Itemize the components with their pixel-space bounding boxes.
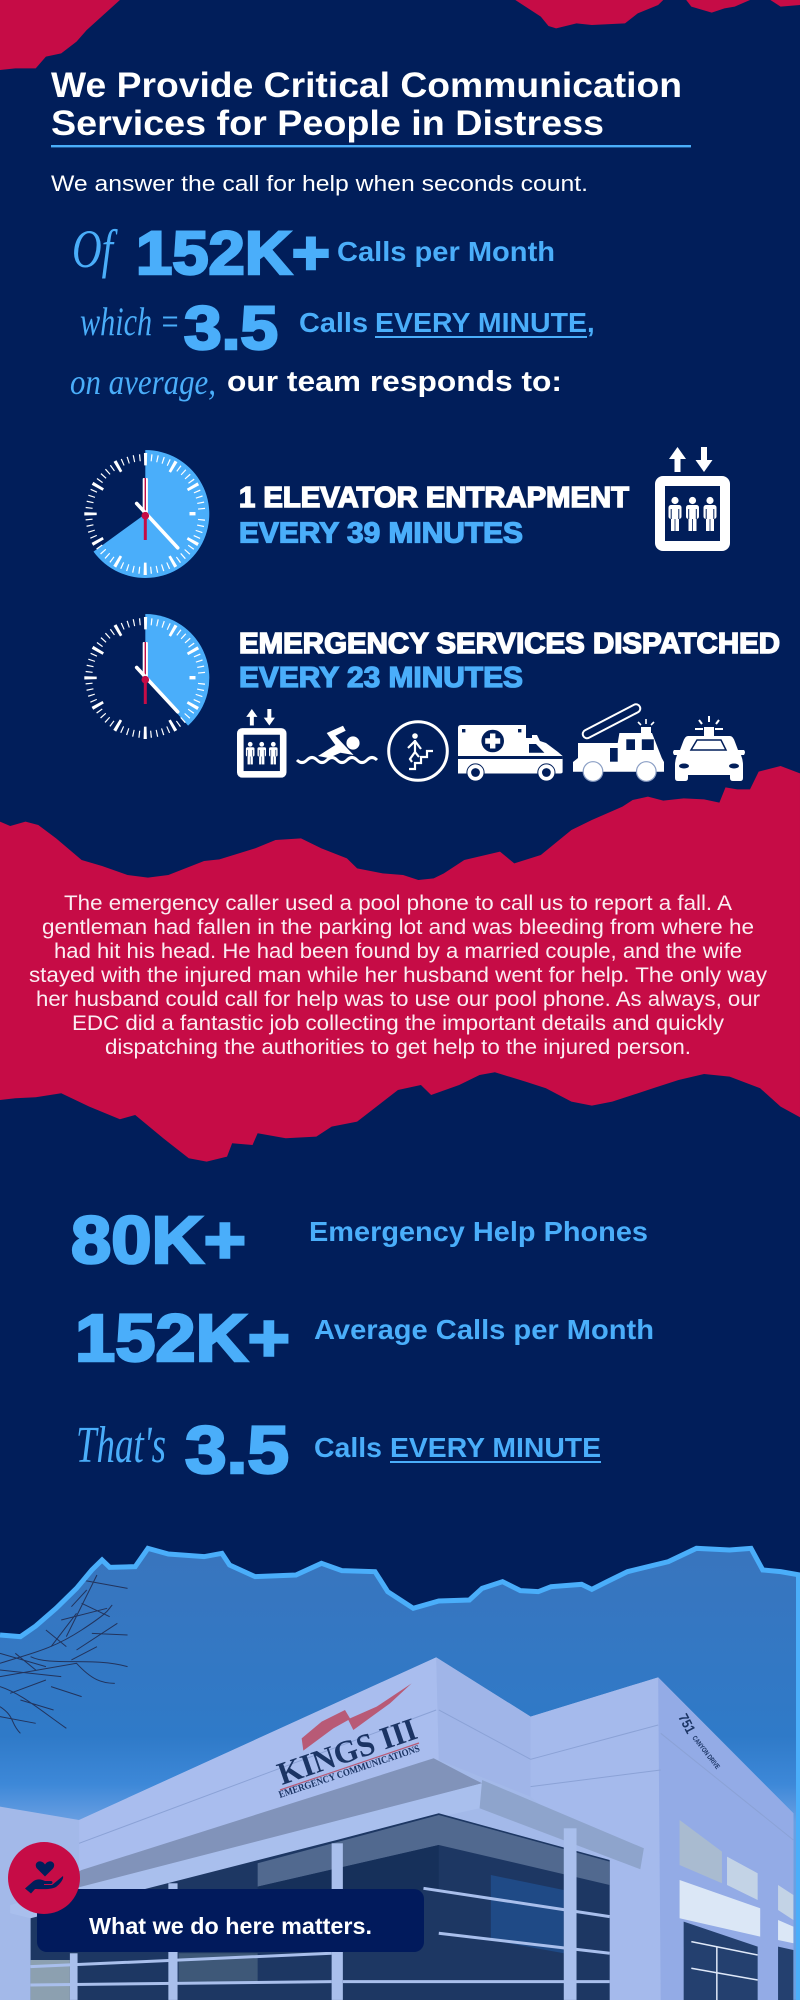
panel: red torn band (0, 766, 800, 1162)
story text: The emergency caller used a pool phone to call us to report a fall. A (64, 892, 732, 915)
address sign: 751 (675, 1711, 699, 1736)
story text: EDC did a fantastic job collecting the important details and quickly (72, 1012, 725, 1035)
stat: 3.5: 3.5 (185, 1413, 289, 1488)
torn red shapes: top right (515, 0, 800, 28)
stat: 3.5: That's (76, 1417, 166, 1474)
story text: had hit his head. He had been found by a married couple, and the wife (54, 940, 742, 963)
heading: 1 elevator entrapment: 1 ELEVATOR ENTRAPMENT (239, 482, 630, 514)
icon: ambulance (458, 725, 563, 781)
icon: stairs fall (389, 722, 447, 780)
stat: 3.5: Calls (314, 1432, 382, 1463)
address sign: CANYON DRIVE (690, 1735, 721, 1771)
logo: Kings III: KINGS III (273, 1710, 421, 1792)
story text: dispatching the authorities to get help to the injured person. (105, 1036, 691, 1059)
story text: gentleman had fallen in the parking lot and was bleeding from where he (42, 916, 754, 939)
stat: 3.5 (76, 1413, 601, 1488)
heading: emergency services dispatched: EVERY 23 MINUTES (239, 662, 523, 694)
heading: emergency services dispatched: EMERGENCY SERVICES DISPATCHED (239, 628, 780, 660)
callout: what we do here matters: What we do here matters. (89, 1913, 372, 1939)
address sign (675, 1711, 721, 1771)
icon: elevator (655, 447, 730, 551)
stat: 152K+ (75, 1301, 654, 1376)
on average, our team responds to: on average, (70, 362, 216, 402)
torn red shape: top left (0, 0, 120, 70)
stat: 152K+ calls per month (72, 219, 555, 287)
stat: 3.5 calls every minute: , (587, 307, 595, 338)
stat: 152K+: Average Calls per Month (314, 1314, 654, 1345)
stat: 80K+ (71, 1203, 648, 1278)
callout: what we do here matters (37, 1889, 424, 1952)
stat: 3.5 calls every minute: EVERY MINUTE (375, 307, 587, 338)
stat: 3.5 calls every minute: which = (80, 299, 180, 344)
story text: her husband could call for help was to use our pool phone. As always, our (36, 988, 760, 1011)
stat: 80K+: Emergency Help Phones (309, 1216, 648, 1247)
icon: small elevator (237, 709, 286, 778)
logo: Kings III (273, 1683, 422, 1801)
icon: fire truck (573, 708, 664, 781)
heading: 1 elevator entrapment: EVERY 39 MINUTES (239, 518, 523, 550)
stat: 3.5 calls every minute: Calls (299, 307, 368, 338)
stat: 152K+ calls per month: 152K+ (136, 219, 330, 287)
logo: Kings III: EMERGENCY COMMUNICATIONS (277, 1743, 422, 1801)
subtitle: We answer the call for help when seconds count. (51, 171, 588, 196)
clock: 23 minutes (89, 614, 209, 734)
icon: police car (673, 716, 745, 781)
stat: 3.5 calls every minute: 3.5 (184, 294, 278, 362)
icon: swimmer (297, 726, 377, 762)
title (51, 66, 691, 147)
title: Services for People in Distress (51, 104, 604, 143)
stat: 152K+ calls per month: Calls per Month (337, 236, 555, 267)
photo: building at dusk (0, 1520, 800, 2000)
heading: emergency services dispatched (239, 628, 780, 694)
icon: heart in hand (8, 1842, 80, 1914)
story text (29, 892, 768, 1059)
building base (0, 1657, 793, 2000)
stat: 152K+ calls per month: Of (72, 219, 118, 279)
heading: 1 elevator entrapment (239, 482, 630, 550)
stat: 3.5 calls every minute (80, 294, 595, 362)
stat: 3.5: EVERY MINUTE (390, 1432, 601, 1463)
stat: 152K+: 152K+ (75, 1301, 290, 1376)
story text: stayed with the injured man while her husband went for help. The only way (29, 964, 768, 987)
stat: 80K+: 80K+ (71, 1203, 246, 1278)
title: We Provide Critical Communication (51, 66, 682, 105)
clock: 39 minutes (89, 450, 209, 578)
on average, our team responds to: our team responds to: (227, 366, 562, 398)
on average, our team responds to (70, 362, 562, 402)
